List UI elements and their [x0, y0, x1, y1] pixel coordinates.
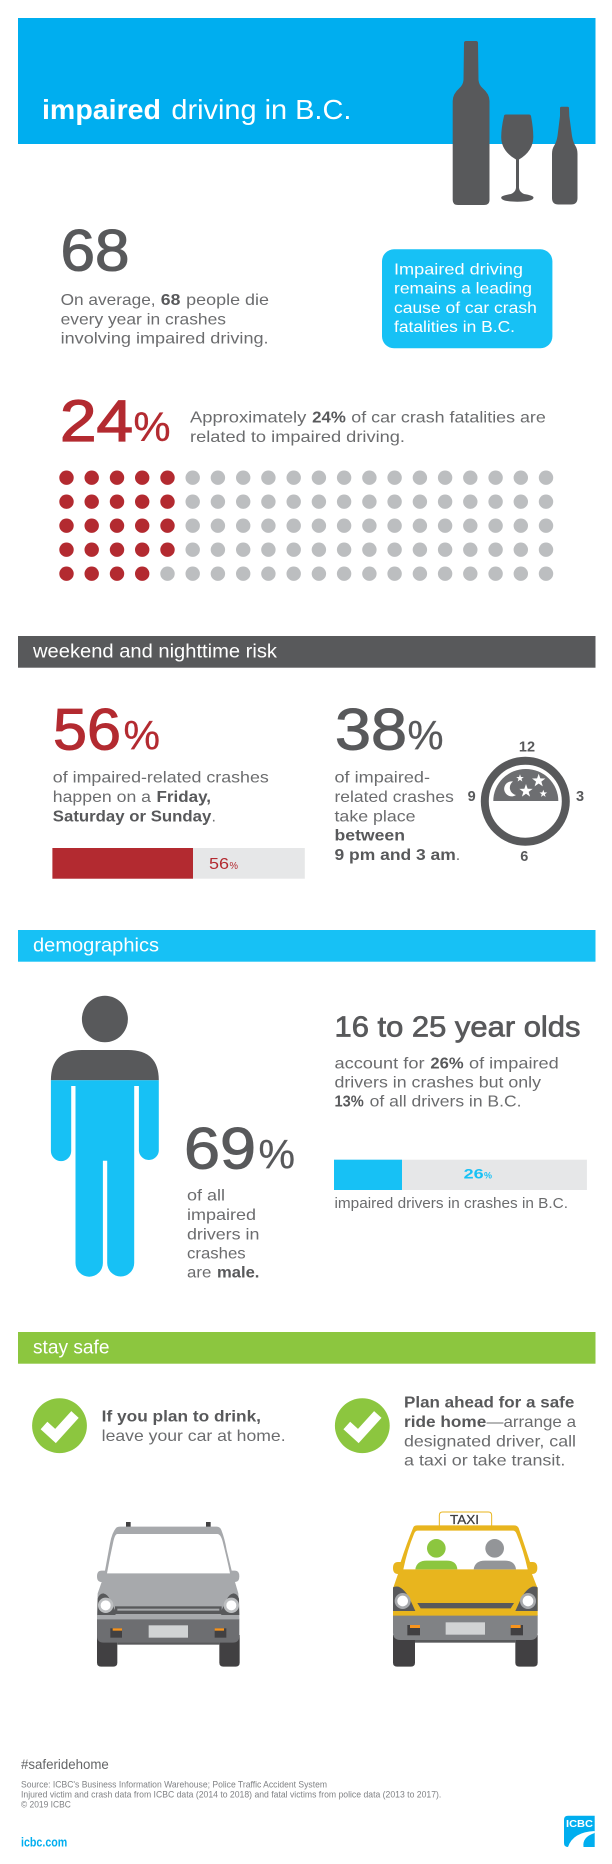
icon: clock with night sky: 12	[519, 740, 535, 756]
taxi roof sign	[439, 1512, 492, 1527]
icon: clock with night sky	[468, 740, 584, 865]
source notes	[21, 1779, 441, 1810]
text: 56 percent description: happen on a	[53, 789, 151, 806]
section heading: weekend and nighttime risk: weekend and nighttime risk	[32, 640, 277, 662]
section heading: stay safe	[18, 1332, 596, 1364]
stat: 38 percent: 38	[335, 697, 407, 762]
text: if you plan to drink: If you plan to drink,	[102, 1409, 261, 1426]
text: if you plan to drink: leave your car at home.	[102, 1428, 286, 1445]
text: 24 percent description	[190, 410, 546, 446]
text: 69 percent description: impaired	[187, 1207, 256, 1224]
icon: taxi with two passengers	[393, 1512, 538, 1667]
logo: ICBC	[564, 1816, 595, 1847]
text: 24 percent description: 24%	[312, 410, 346, 427]
text: 69 percent description: crashes	[187, 1246, 246, 1263]
text: 38 percent description: 9 pm and 3 am	[334, 847, 456, 864]
callout: leading cause: cause of car crash	[394, 300, 537, 317]
text: 69 percent description: of all	[187, 1188, 225, 1205]
stat: 38 percent	[335, 697, 444, 762]
passenger: grey	[474, 1539, 516, 1569]
text: 38 percent description: related crashes	[334, 789, 454, 806]
icon: bottles and wine glass	[453, 41, 578, 205]
icon: check mark 2	[335, 1398, 390, 1453]
bar caption: impaired drivers in crashes in B.C.	[334, 1195, 568, 1212]
text: 24 percent description: of car crash fatalities are	[351, 410, 546, 427]
section heading: demographics: demographics	[33, 935, 159, 957]
bar chart: 56 percent: %	[230, 861, 238, 872]
bar chart: 56 percent: 56	[209, 856, 229, 873]
stat: 24 percent: %	[134, 404, 170, 450]
text: plan ahead: —arrange a	[486, 1414, 576, 1431]
header banner	[18, 18, 596, 205]
icon: clock with night sky: 6	[520, 849, 528, 865]
text: 69 percent description: male.	[217, 1265, 259, 1282]
title	[42, 94, 351, 125]
text: 56 percent description: .	[212, 808, 216, 825]
text: 38 percent description: .	[456, 847, 460, 864]
icon: person 69 percent filled	[51, 996, 159, 1277]
text: 56 percent description: Saturday or Sunday	[53, 808, 211, 825]
website: icbc.com	[21, 1835, 67, 1850]
section heading: stay safe: stay safe	[33, 1336, 110, 1358]
dot chart: 24 of 100	[59, 470, 553, 581]
bar chart: 26 percent: 26	[464, 1165, 484, 1181]
text: 24 percent description: Approximately	[190, 410, 306, 427]
stat: 68 deaths	[60, 219, 269, 347]
text: 56 percent description: Friday,	[156, 789, 211, 806]
stat: 69 percent: 69	[184, 1116, 256, 1181]
logo: ICBC: ICBC	[566, 1818, 593, 1830]
callout: leading cause: remains a leading	[394, 281, 532, 298]
icon: clock with night sky: 3	[576, 789, 584, 805]
bar chart: 26 percent	[334, 1160, 587, 1190]
source notes: Source: ICBC's Business Information Warehouse; Police Traffic Accident System	[21, 1779, 327, 1789]
stat: 38 percent: %	[408, 712, 444, 758]
text: young drivers description: account for	[334, 1055, 425, 1072]
text: 68 description: On average,	[61, 292, 156, 309]
stat: 56 percent: 56	[53, 697, 121, 762]
text: 69 percent description: drivers in	[187, 1226, 259, 1243]
stat: 56 percent	[53, 697, 160, 762]
title: driving in B.C.	[171, 94, 351, 125]
text: 69 percent description: are	[187, 1265, 211, 1282]
section heading: demographics	[18, 930, 596, 962]
title: impaired	[42, 94, 161, 125]
text: young drivers description: of all drivers in B.C.	[370, 1094, 522, 1111]
section heading: weekend and nighttime risk	[18, 636, 596, 668]
text: plan ahead: a taxi or take transit.	[404, 1453, 565, 1470]
hashtag: #saferidehome	[21, 1757, 109, 1772]
text: 68 description	[61, 292, 269, 347]
text: plan ahead: Plan ahead for a safe	[404, 1395, 574, 1412]
icon: check mark 1	[32, 1398, 87, 1453]
text: plan ahead	[404, 1395, 576, 1470]
text: 68 description: 68	[161, 292, 181, 309]
text: young drivers description: drivers in crashes but only	[334, 1074, 541, 1091]
text: 68 description: every year in crashes	[61, 311, 226, 328]
text: 56 percent description	[53, 770, 269, 825]
text: young drivers description: 26%	[430, 1055, 464, 1072]
stat: 69 percent: %	[258, 1131, 295, 1177]
text: young drivers description: 13%	[334, 1094, 364, 1111]
stat: 56 percent: %	[124, 712, 160, 758]
stat: 68 deaths: 68	[60, 219, 130, 284]
passenger: green	[415, 1539, 457, 1569]
text: 38 percent description: of impaired-	[334, 770, 430, 787]
text: plan ahead: ride home	[404, 1414, 486, 1431]
icon: parked car	[97, 1522, 240, 1667]
text: 24 percent description: related to impaired driving.	[190, 429, 405, 446]
text: 69 percent description	[187, 1188, 259, 1282]
text: if you plan to drink	[102, 1409, 286, 1445]
stat: 24 percent: 24	[60, 389, 133, 454]
source notes: © 2019 ICBC	[21, 1800, 71, 1810]
callout: leading cause	[382, 249, 552, 348]
text: plan ahead: designated driver, call	[404, 1433, 576, 1450]
callout: leading cause: Impaired driving	[394, 261, 523, 278]
stat: 24 percent	[60, 389, 170, 454]
taxi roof sign: TAXI	[450, 1513, 479, 1527]
text: 68 description: involving impaired driving.	[61, 330, 269, 347]
heading: 16 to 25 year olds: 16 to 25 year olds	[334, 1012, 580, 1044]
text: 56 percent description: of impaired-related crashes	[53, 770, 269, 787]
text: 38 percent description: take place	[334, 808, 416, 825]
bar chart: 56 percent	[52, 848, 305, 879]
callout: leading cause: fatalities in B.C.	[394, 319, 515, 336]
text: young drivers description	[334, 1055, 559, 1111]
icon: clock with night sky: 9	[468, 789, 476, 805]
stat: 69 percent	[184, 1116, 295, 1181]
text: 38 percent description: between	[334, 828, 405, 845]
text: 68 description: people die	[186, 292, 269, 309]
bar chart: 26 percent: %	[484, 1170, 492, 1180]
text: 38 percent description	[334, 770, 460, 864]
source notes: Injured victim and crash data from ICBC data (2014 to 2018) and fatal victims from police data (2013 to 2017).	[21, 1790, 441, 1800]
text: young drivers description: of impaired	[469, 1055, 559, 1072]
